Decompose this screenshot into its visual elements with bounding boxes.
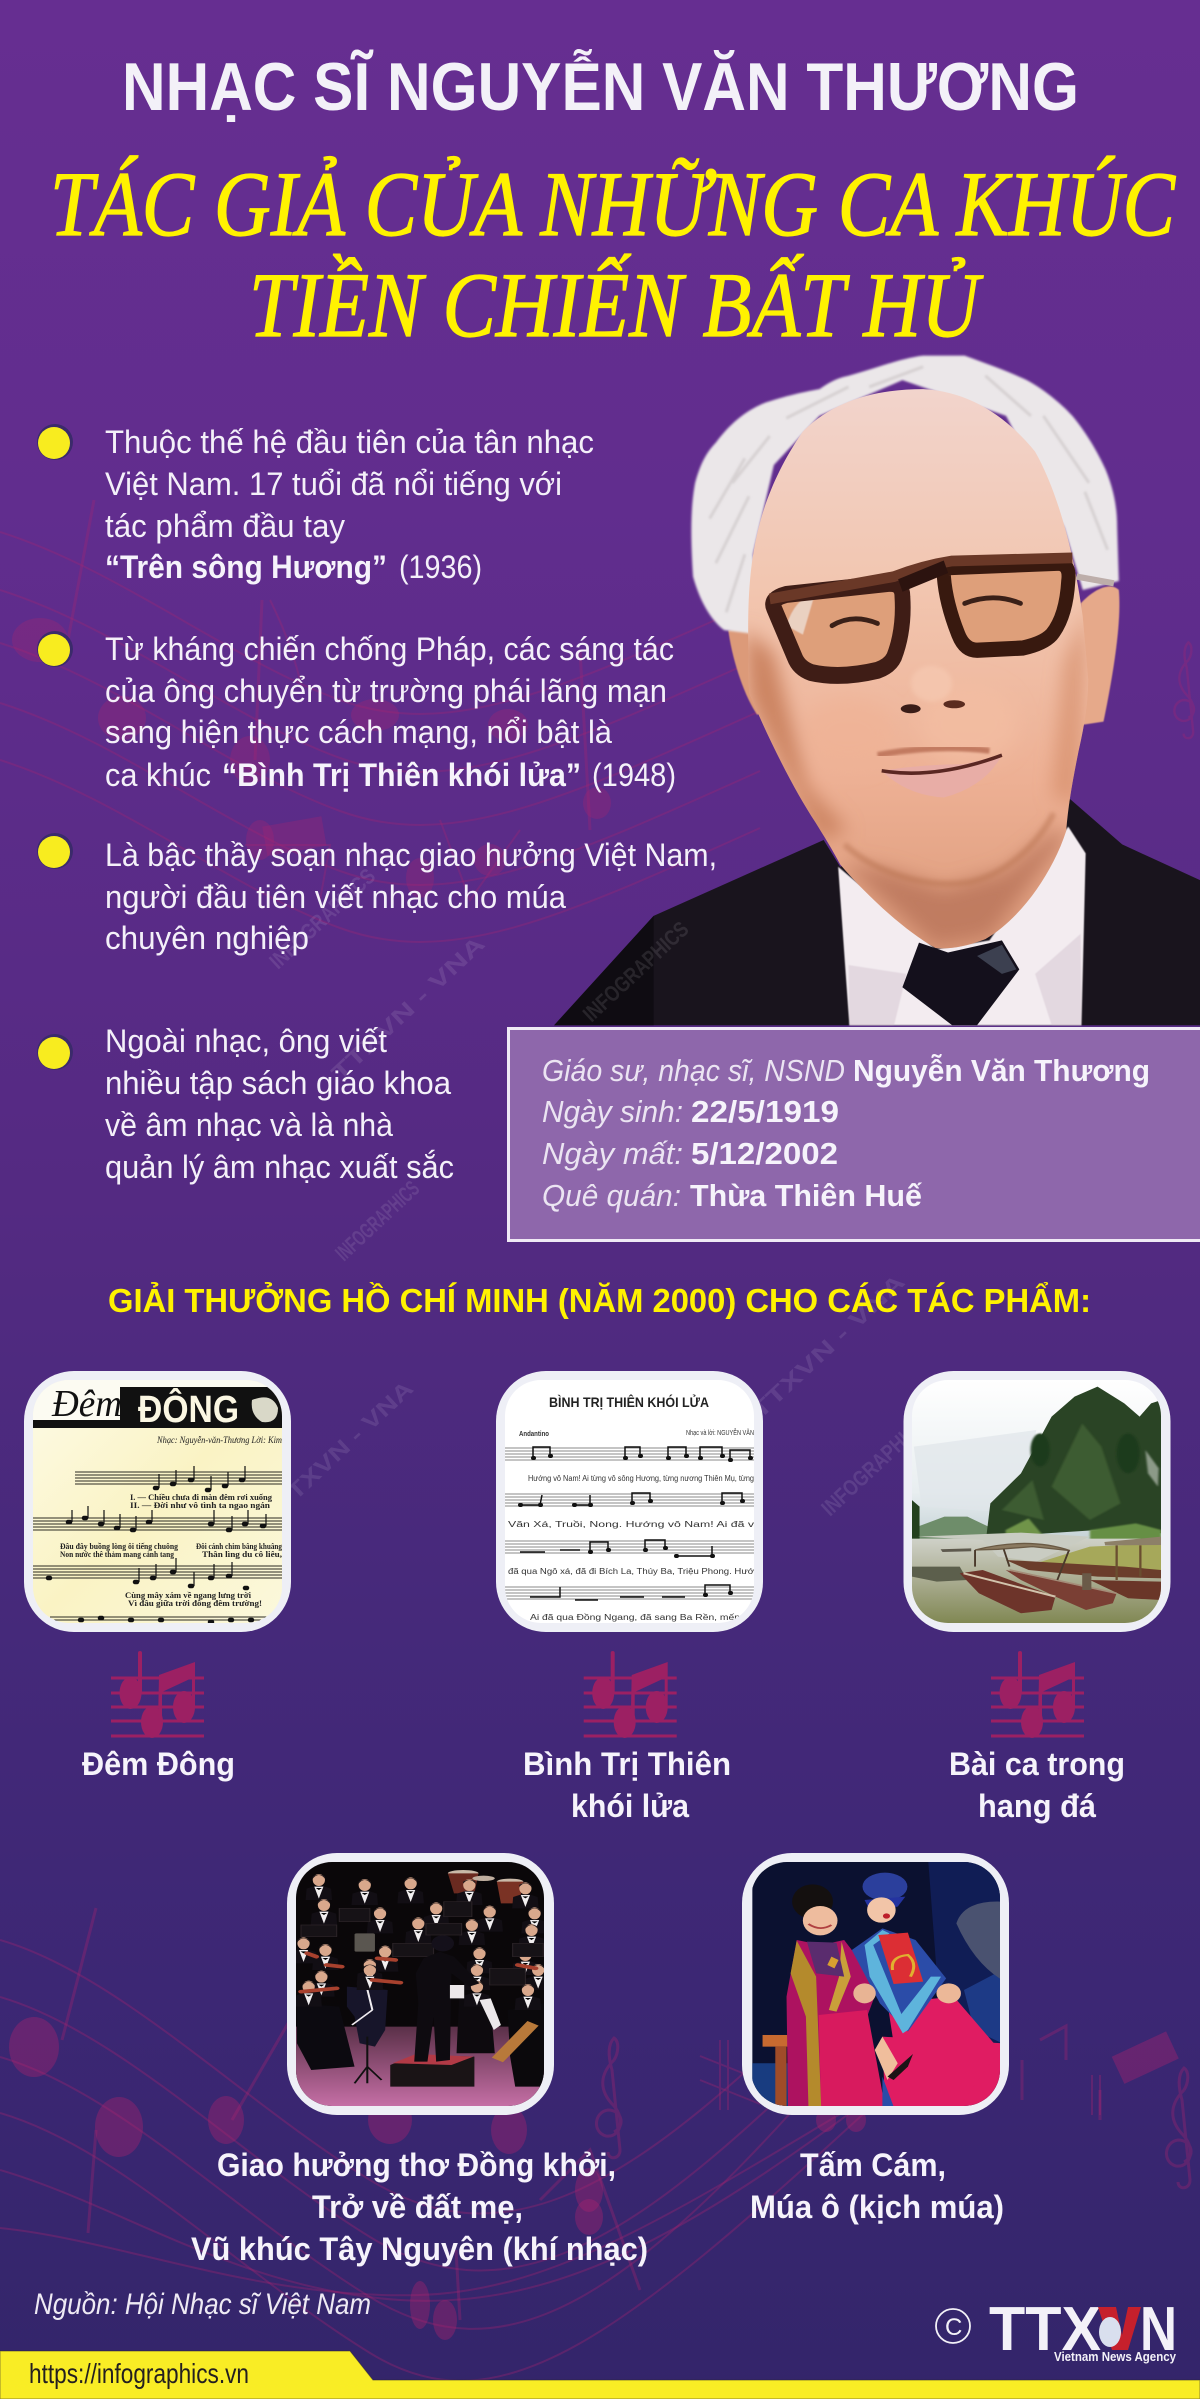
score <box>450 1985 501 2030</box>
bullet 3: Là bậc thầy soạn nhạc giao hưởng Việt Nam, <box>105 837 717 873</box>
awards heading: GIẢI THƯỞNG HỒ CHÍ MINH (NĂM 2000) CHO CÁC TÁC PHẨM: <box>108 1282 1091 1319</box>
conductor <box>414 1952 480 2062</box>
seated woman in magenta <box>787 1884 885 2107</box>
nose <box>901 704 921 713</box>
card: Đêm Đông sheet music: II. — Đời như vô tình ta ngao ngán <box>130 1501 271 1510</box>
card: Bình Trị Thiên khói lửa sheet music: BÌNH TRỊ THIÊN KHÓI LỬA <box>549 1393 709 1410</box>
label: Bài ca trong hang đá <box>949 1746 1125 1824</box>
watermarks: TTXVN - VNA <box>326 931 490 1086</box>
bullet 2: của ông chuyển từ trường phái lãng mạn <box>105 673 667 709</box>
glasses lenses <box>773 583 903 675</box>
hair <box>691 356 1119 635</box>
card: Bài ca trong hang đá landscape <box>904 1371 1170 1632</box>
info box: Giáo sư, nhạc sĩ, NSND <box>542 1053 845 1088</box>
icon: music staff 2 <box>584 1653 677 1738</box>
label: Giao hưởng: Giao hưởng thơ Đồng khởi, <box>217 2147 616 2183</box>
card: Đêm Đông sheet music: ĐÔNG <box>138 1386 239 1431</box>
logo: TTXVN <box>936 2295 1177 2364</box>
timpani <box>448 1870 523 1903</box>
seated woman in blue <box>852 1873 1002 2107</box>
card: Bình Trị Thiên khói lửa sheet music: Nhạc và lời: NGUYỄN VĂN <box>686 1428 754 1437</box>
title line: yellow second: TIỀN CHIẾN BẤT HỦ <box>249 254 984 356</box>
card: Bình Trị Thiên khói lửa sheet music: Andantino <box>519 1431 549 1438</box>
necktie <box>902 940 1019 1025</box>
bullet 4: Ngoài nhạc, ông viết <box>105 1023 387 1059</box>
card: Bình Trị Thiên khói lửa sheet music: Ai đã qua Đồng Ngang, đã sang Ba Rền, mến <box>530 1613 740 1622</box>
watermarks: INFOGRAPHICS <box>264 863 380 974</box>
source: Nguồn: Hội Nhạc sĩ Việt Nam <box>34 2288 371 2321</box>
card: Đêm Đông sheet music: Đêm <box>51 1383 122 1425</box>
bullet 4: nhiều tập sách giáo khoa <box>105 1065 451 1101</box>
card: Đêm Đông sheet music: Đôi cánh chim bâng khuâng <box>196 1542 282 1551</box>
bullet 1: Thuộc thế hệ đầu tiên của tân nhạc <box>105 424 594 460</box>
card: Đêm Đông sheet music: Nhạc: Nguyễn-văn-Thương Lời: Kim <box>156 1435 282 1445</box>
label: Bài ca trong hang đá: hang đá <box>978 1788 1096 1824</box>
bullet 1: Việt Nam. 17 tuổi đã nổi tiếng với <box>105 466 562 502</box>
shirt <box>838 827 1086 1025</box>
bullet 1: “Trên sông Hương” <box>105 549 387 585</box>
bullets list <box>37 424 717 1185</box>
label: Bình Trị Thiên khói lửa <box>523 1746 731 1824</box>
footer band <box>0 2351 1200 2399</box>
background music motifs: lower staff <box>0 1908 1191 2381</box>
background music motifs: upper staff <box>0 500 1194 942</box>
portrait photo <box>554 356 1200 1027</box>
watermarks: TTXVN - VNA <box>269 1376 418 1517</box>
copyright mark: C <box>945 2314 962 2341</box>
violins <box>301 1953 536 1992</box>
card: Đêm Đông sheet music <box>24 1371 291 1632</box>
card: Đêm Đông sheet music: Cùng mây xám về ngang lưng trời <box>125 1591 252 1600</box>
seated players <box>296 2026 354 2070</box>
podium <box>390 2055 474 2087</box>
info box: Ngày mất: <box>542 1136 683 1171</box>
logo: TTXVN: TTX <box>989 2295 1101 2364</box>
label: Tấm Cám <box>750 2147 1004 2225</box>
label: Giao hưởng <box>191 2147 648 2267</box>
logo: TTXVN: Vietnam News Agency <box>1054 2349 1177 2364</box>
card: Bình Trị Thiên khói lửa sheet music: đã qua Ngô xá, đã đi Bích La, Thúy Ba, Triệu Phong. Hướ <box>508 1567 755 1576</box>
info box: Nguyễn Văn Thương <box>853 1053 1150 1088</box>
watermark on portrait: INFOGRAPHICS <box>578 916 694 1027</box>
logo: TTXVN: N <box>1140 2295 1177 2364</box>
ears <box>728 586 1119 725</box>
label: Tấm Cám: Múa ô (kịch múa) <box>750 2189 1004 2225</box>
bullet 1: (1936) <box>399 549 482 585</box>
info box <box>508 1028 1200 1240</box>
bullet 4: quản lý âm nhạc xuất sắc <box>105 1149 454 1185</box>
watermarks: TTXVN - VNA <box>746 1269 910 1424</box>
bullet 3 <box>37 833 717 956</box>
bullet 4: về âm nhạc và là nhà <box>105 1107 393 1143</box>
info box: 22/5/1919 <box>691 1094 839 1129</box>
bullet 2: sang hiện thực cách mạng, nổi bật là <box>105 714 612 750</box>
copyright mark <box>936 2309 970 2343</box>
info box: Ngày sinh: <box>542 1094 683 1129</box>
info box: Quê quán: <box>542 1178 681 1213</box>
cello <box>497 2023 533 2060</box>
title line: white name: NHẠC SĨ NGUYỄN VĂN THƯƠNG <box>122 48 1079 125</box>
face shading <box>919 684 1018 764</box>
icon: music staff 3 <box>991 1653 1084 1738</box>
info box: Thừa Thiên Huế <box>690 1178 923 1213</box>
label: Giao hưởng: Vũ khúc Tây Nguyên (khí nhạc) <box>191 2231 648 2267</box>
watermarks <box>264 863 932 1521</box>
card: Đêm Đông sheet music: Vì đâu giữa trời đông đêm trường! <box>128 1599 262 1608</box>
bullet 1 <box>37 424 594 585</box>
eyes <box>832 598 1021 626</box>
bullet 2: (1948) <box>592 757 676 793</box>
card: Đêm Đông sheet music: Đâu đây buồng lòng ôi tiếng chuông <box>60 1542 178 1551</box>
watermarks: INFOGRAPHICS <box>816 1410 932 1521</box>
card: Đêm Đông sheet music: I. — Chiều chưa đi màn đêm rơi xuống <box>130 1493 272 1502</box>
bullet 2 <box>37 631 676 793</box>
glasses frame <box>770 558 1114 675</box>
mouth <box>878 748 1002 798</box>
bullet 2: Từ kháng chiến chống Pháp, các sáng tác <box>105 631 674 667</box>
watermarks: INFOGRAPHICS <box>330 1176 424 1266</box>
bullet 2: “Bình Trị Thiên khói lửa” <box>222 757 581 793</box>
label: Bình Trị Thiên khói lửa: Bình Trị Thiên <box>523 1746 731 1782</box>
face <box>748 389 1088 948</box>
info box: 5/12/2002 <box>691 1136 838 1171</box>
card: Bình Trị Thiên khói lửa sheet music: Hướng vô Nam! Ai từng vô sông Hương, từng nương Thiên Mụ, từng <box>528 1474 754 1483</box>
label: Giao hưởng: Trở về đất mẹ, <box>312 2189 523 2225</box>
card: Đêm Đông sheet music: Non nước thê thảm mang cảnh tang <box>60 1550 174 1559</box>
label: Bình Trị Thiên khói lửa: khói lửa <box>571 1788 689 1824</box>
title <box>50 48 1176 356</box>
card: Bình Trị Thiên khói lửa sheet music <box>496 1371 763 1632</box>
bullet 3: chuyên nghiệp <box>105 920 309 956</box>
suit <box>554 798 1200 1025</box>
label: Đêm Đông: Đêm Đông <box>82 1746 235 1782</box>
label: Bài ca trong hang đá: Bài ca trong <box>949 1746 1125 1782</box>
label: Tấm Cám: Tấm Cám, <box>800 2147 946 2183</box>
bullet 2: ca khúc <box>105 757 211 793</box>
bullet 1: tác phẩm đầu tay <box>105 508 345 544</box>
tripod <box>355 2037 382 2083</box>
icon: music staff 1 <box>111 1653 204 1738</box>
bullet 3: người đầu tiên viết nhạc cho múa <box>105 879 566 915</box>
card: dance drama photo <box>742 1853 1009 2115</box>
bullet 4 <box>37 1023 454 1185</box>
card: orchestra photo <box>287 1853 554 2115</box>
footer band: https://infographics.vn <box>29 2358 249 2389</box>
card: Đêm Đông sheet music: Thân lìng du cô liêu, <box>202 1550 282 1559</box>
card: Bình Trị Thiên khói lửa sheet music: Văn Xá, Truồi, Nong. Hướng vô Nam! Ai đã v <box>508 1520 754 1529</box>
